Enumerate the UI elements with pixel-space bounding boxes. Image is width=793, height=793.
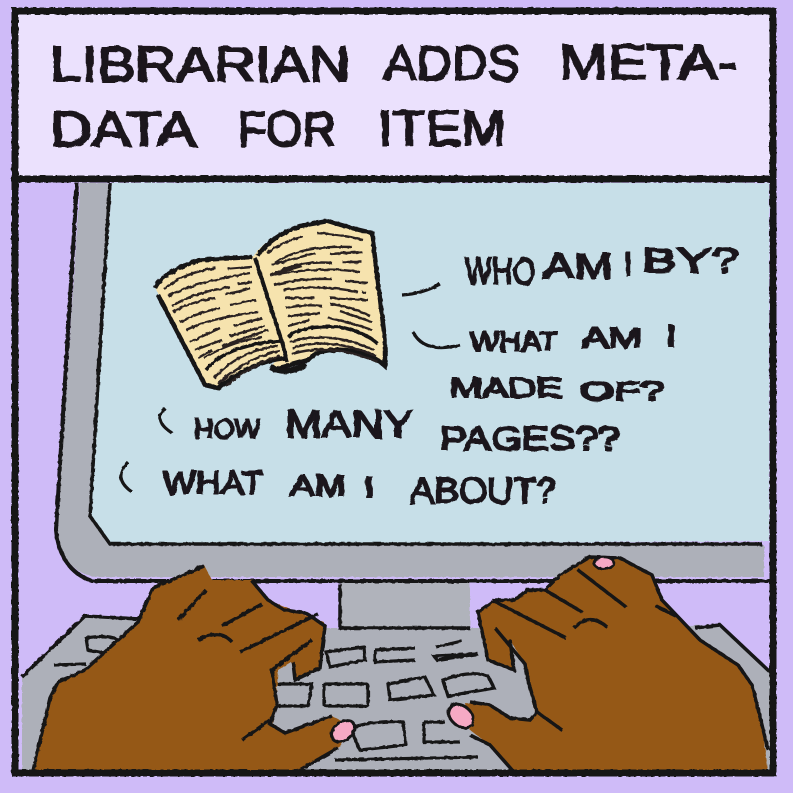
- question: made of: [450, 372, 665, 406]
- question: who am I by: WHO: [465, 251, 535, 293]
- right hand: [444, 557, 768, 771]
- title line 1: META-: [559, 36, 737, 90]
- question: how many pages: HOW: [194, 414, 261, 444]
- title line 2: FOR: [238, 103, 336, 157]
- icon: open book: [155, 221, 386, 388]
- question: how many pages: PAGES??: [440, 420, 620, 458]
- question: made of: OF?: [580, 376, 665, 406]
- book text lines: [164, 233, 378, 386]
- questions block: [121, 242, 740, 511]
- left thumbnail: [327, 716, 359, 746]
- keys: [54, 636, 494, 760]
- question: made of: MADE: [450, 372, 562, 403]
- question: what am I about: WHAT: [163, 465, 263, 501]
- question: what am I about: ABOUT?: [410, 470, 556, 511]
- question: how many pages: MANY: [285, 404, 413, 446]
- monitor: [56, 183, 770, 629]
- right thumbnail: [444, 699, 478, 733]
- question: what am I: [470, 320, 676, 357]
- title line 2: DATA: [50, 103, 196, 157]
- title line 1: [50, 36, 737, 92]
- title line 2: ITEM: [378, 102, 506, 156]
- panel: title band: [15, 11, 773, 179]
- question: who am I by: AM: [543, 247, 613, 286]
- question: who am I by: I: [624, 246, 632, 282]
- keyboard: [22, 584, 770, 771]
- mark strokes: [121, 284, 460, 492]
- question: how many pages: [194, 404, 620, 458]
- question: what am I: I: [666, 320, 676, 353]
- question: what am I: WHAT: [470, 326, 558, 357]
- title line 1: ADDS: [384, 37, 520, 91]
- right nails: [594, 557, 614, 569]
- question: what am I about: AM: [290, 470, 346, 503]
- question: who am I by: [465, 242, 740, 293]
- left hand: [33, 565, 359, 771]
- title line 2: [50, 102, 506, 157]
- question: what am I: AM: [582, 322, 642, 353]
- question: what am I about: I: [364, 471, 374, 504]
- title line 1: LIBRARIAN: [50, 38, 350, 92]
- question: what am I about: [163, 465, 556, 511]
- question: who am I by: BY?: [642, 242, 740, 280]
